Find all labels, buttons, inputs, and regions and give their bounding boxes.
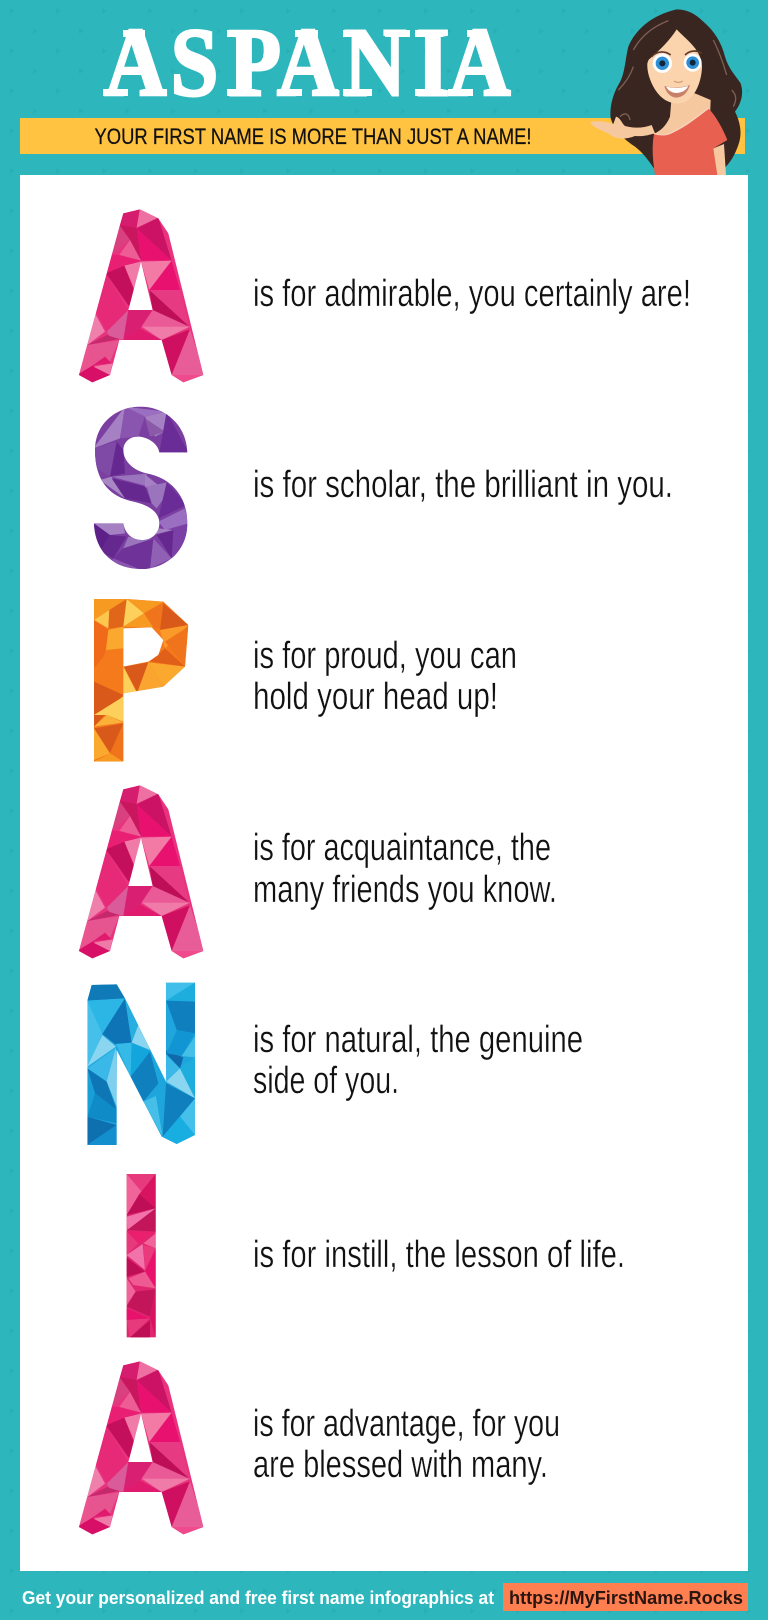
- footer text: Get your personalized and free first name infographics at: [22, 1588, 494, 1608]
- row: letter P proud: [93, 598, 517, 763]
- row: letter S scholar: [90, 405, 673, 572]
- text: natural: side of you.: [253, 1060, 399, 1102]
- footer link badge: [503, 1583, 748, 1611]
- text: instill: is for instill, the lesson of life.: [253, 1234, 625, 1276]
- icon: polygon letter A: [77, 208, 207, 385]
- icon: polygon letter S: [90, 405, 190, 572]
- text: natural: is for natural, the genuine: [253, 1019, 583, 1061]
- icon: polygon letter A: [77, 784, 207, 961]
- text: proud: [253, 635, 517, 718]
- banner: [20, 118, 745, 154]
- row: letter A admirable: [77, 208, 691, 385]
- text: acquaintance: is for acquaintance, the: [253, 827, 551, 869]
- text: advantage: are blessed with many.: [253, 1444, 548, 1486]
- text: acquaintance: [253, 827, 557, 911]
- text: advantage: is for advantage, for you: [253, 1403, 560, 1445]
- row: letter I instill: [127, 1174, 625, 1337]
- text: proud: hold your head up!: [253, 676, 498, 718]
- text: advantage: [253, 1403, 560, 1486]
- icon: polygon letter I: [127, 1174, 156, 1337]
- title: ASPANIA: [105, 9, 510, 116]
- row: letter A advantage: [77, 1360, 560, 1537]
- footer link badge: https://MyFirstName.Rocks: [509, 1588, 743, 1608]
- banner: YOUR FIRST NAME IS MORE THAN JUST A NAME!: [94, 124, 532, 149]
- icon: polygon letter A: [77, 1360, 207, 1537]
- icon: polygon letter N: [87, 982, 197, 1147]
- row: letter N natural: [87, 982, 583, 1147]
- icon: cartoon woman: [590, 9, 742, 175]
- row: letter A acquaintance: [77, 784, 557, 961]
- icon: polygon letter P: [93, 598, 190, 763]
- text: acquaintance: many friends you know.: [253, 869, 557, 911]
- text: proud: is for proud, you can: [253, 635, 517, 677]
- text: natural: [253, 1019, 583, 1102]
